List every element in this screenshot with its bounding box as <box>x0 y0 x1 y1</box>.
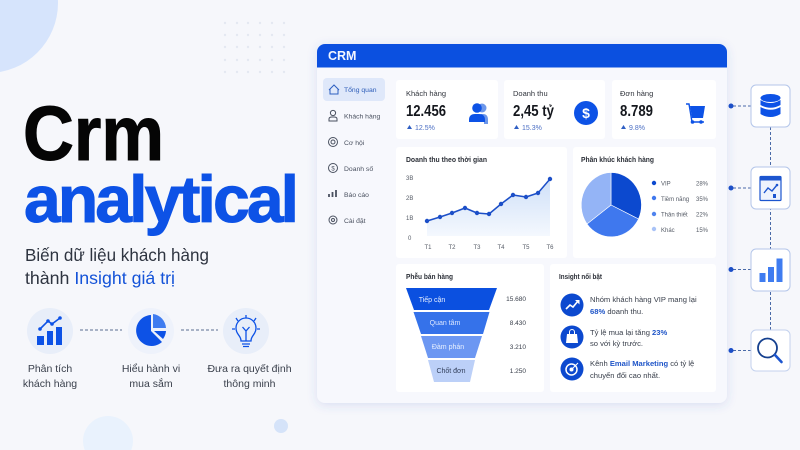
sidebar: Cơ hội <box>344 140 365 147</box>
card: line chart doanh thu: 1B <box>406 216 413 222</box>
decorative dot grid <box>224 22 285 73</box>
card: khách hàng: Khách hàng <box>406 89 446 98</box>
insight 2 <box>560 326 667 348</box>
insight 1: Nhóm khách hàng VIP mang lại <box>590 295 697 304</box>
card: đơn hàng <box>612 80 716 139</box>
benefit: đưa ra quyết định thông minh <box>207 308 292 390</box>
card: insight nổi bật <box>550 264 716 392</box>
card: line chart doanh thu: T3 <box>473 245 481 251</box>
icon box: database <box>751 85 790 127</box>
legend: 15% <box>696 228 709 234</box>
connectors right <box>733 106 770 350</box>
card: funnel phễu bán hàng: Quan tâm <box>430 320 461 327</box>
card: funnel phễu bán hàng: 3.210 <box>510 344 526 351</box>
card: doanh thu: Doanh thu <box>513 89 548 98</box>
card: đơn hàng: Đơn hàng <box>620 89 653 98</box>
decorative circle top left <box>0 0 58 73</box>
decorative small circle <box>274 419 288 433</box>
benefit: phân tích khách hàng <box>23 308 77 390</box>
benefit: hiểu hành vi mua sắm <box>122 308 180 390</box>
card: line chart doanh thu: T5 <box>522 245 530 251</box>
pie chart <box>581 172 641 237</box>
benefit: phân tích khách hàng: khách hàng <box>23 378 77 390</box>
card: funnel phễu bán hàng: Chốt đơn <box>436 366 466 375</box>
card: doanh thu: 2,45 tỷ <box>513 103 554 120</box>
legend: 22% <box>696 212 709 218</box>
card: pie phân khúc khách hàng <box>573 147 716 258</box>
card: pie phân khúc khách hàng: Phân khúc khách hàng <box>581 155 654 164</box>
card: doanh thu: 15.3% <box>522 125 542 132</box>
card: khách hàng: 12.456 <box>406 103 446 120</box>
sidebar: Doanh số <box>344 164 373 173</box>
legend <box>652 181 709 234</box>
card: đơn hàng: 9.8% <box>629 125 645 132</box>
legend: Thân thiết <box>661 212 688 218</box>
card: insight nổi bật: Insight nổi bật <box>559 273 603 281</box>
insight 2: so với kỳ trước. <box>590 339 643 348</box>
card: line chart doanh thu: Doanh thu theo thời gian <box>406 155 487 164</box>
sidebar: Báo cáo <box>344 192 369 199</box>
icon: cart <box>686 104 705 124</box>
benefit: hiểu hành vi mua sắm: mua sắm <box>129 377 173 390</box>
card: line chart doanh thu: T2 <box>448 245 456 251</box>
header title: CRM <box>328 49 356 63</box>
card: line chart doanh thu: T4 <box>497 245 505 251</box>
decorative circle bottom <box>83 416 133 450</box>
icon box: chart window <box>751 167 790 209</box>
connector <box>181 329 218 331</box>
insight 2: Tỷ lệ mua lại tăng 23% <box>590 328 667 337</box>
card: funnel phễu bán hàng: 8.430 <box>510 320 526 327</box>
benefit: đưa ra quyết định thông minh: Đưa ra quyết định <box>207 363 292 375</box>
card: funnel phễu bán hàng: Tiếp cận <box>419 295 445 304</box>
legend: 28% <box>696 182 709 188</box>
subtitle: thành Insight giá trị <box>25 268 175 288</box>
benefit: đưa ra quyết định thông minh: thông minh <box>224 378 276 390</box>
icon: users <box>469 103 488 124</box>
icon box: bar chart <box>751 249 790 291</box>
benefit: phân tích khách hàng: Phân tích <box>28 363 72 375</box>
legend: VIP <box>661 182 671 188</box>
subtitle: Biến dữ liệu khách hàng <box>25 245 209 265</box>
title: analytical: analytical <box>24 162 299 236</box>
card: line chart doanh thu: T1 <box>424 245 432 251</box>
insight 1 <box>560 294 697 316</box>
card: line chart doanh thu <box>396 147 567 258</box>
insight 3: Kênh Email Marketing có tỷ lệ <box>590 359 694 368</box>
icon: dollar <box>574 101 598 125</box>
insight 1: 68% doanh thu. <box>590 307 643 316</box>
insight 3 <box>560 358 694 380</box>
card: khách hàng <box>396 80 498 139</box>
connector dots <box>728 104 734 353</box>
card: funnel phễu bán hàng: 1.250 <box>510 368 526 375</box>
sidebar: Khách hàng <box>344 114 381 120</box>
card: line chart doanh thu: 2B <box>406 196 413 202</box>
card: doanh thu <box>504 80 605 139</box>
card: funnel phễu bán hàng <box>396 264 544 392</box>
title: Crm: Crm <box>23 91 164 177</box>
insight 3: chuyển đổi cao nhất. <box>590 371 660 380</box>
sidebar: $ <box>331 166 335 172</box>
panel: dashboard <box>317 44 727 403</box>
card: đơn hàng: 8.789 <box>620 103 653 120</box>
card: funnel phễu bán hàng: 15.680 <box>506 296 526 303</box>
card: line chart doanh thu: 3B <box>406 176 413 182</box>
card: khách hàng: 12.5% <box>415 125 435 132</box>
card: doanh thu: $ <box>582 105 590 121</box>
benefit: hiểu hành vi mua sắm: Hiểu hành vi <box>122 363 180 375</box>
sidebar <box>323 78 385 225</box>
card: funnel phễu bán hàng: Đàm phán <box>432 344 464 351</box>
sidebar: Tổng quan <box>344 86 377 94</box>
card: line chart doanh thu: T6 <box>546 245 554 251</box>
card: line chart doanh thu: 0 <box>408 236 412 242</box>
legend: 35% <box>696 197 709 203</box>
sidebar: Cài đặt <box>344 218 366 225</box>
icon box: search <box>751 330 790 371</box>
card: funnel phễu bán hàng: Phễu bán hàng <box>406 272 453 281</box>
dashboard header <box>317 44 727 68</box>
connector <box>80 329 122 331</box>
legend: Tiềm năng <box>661 197 689 203</box>
subtitle <box>25 245 209 288</box>
legend: Khác <box>661 228 675 234</box>
